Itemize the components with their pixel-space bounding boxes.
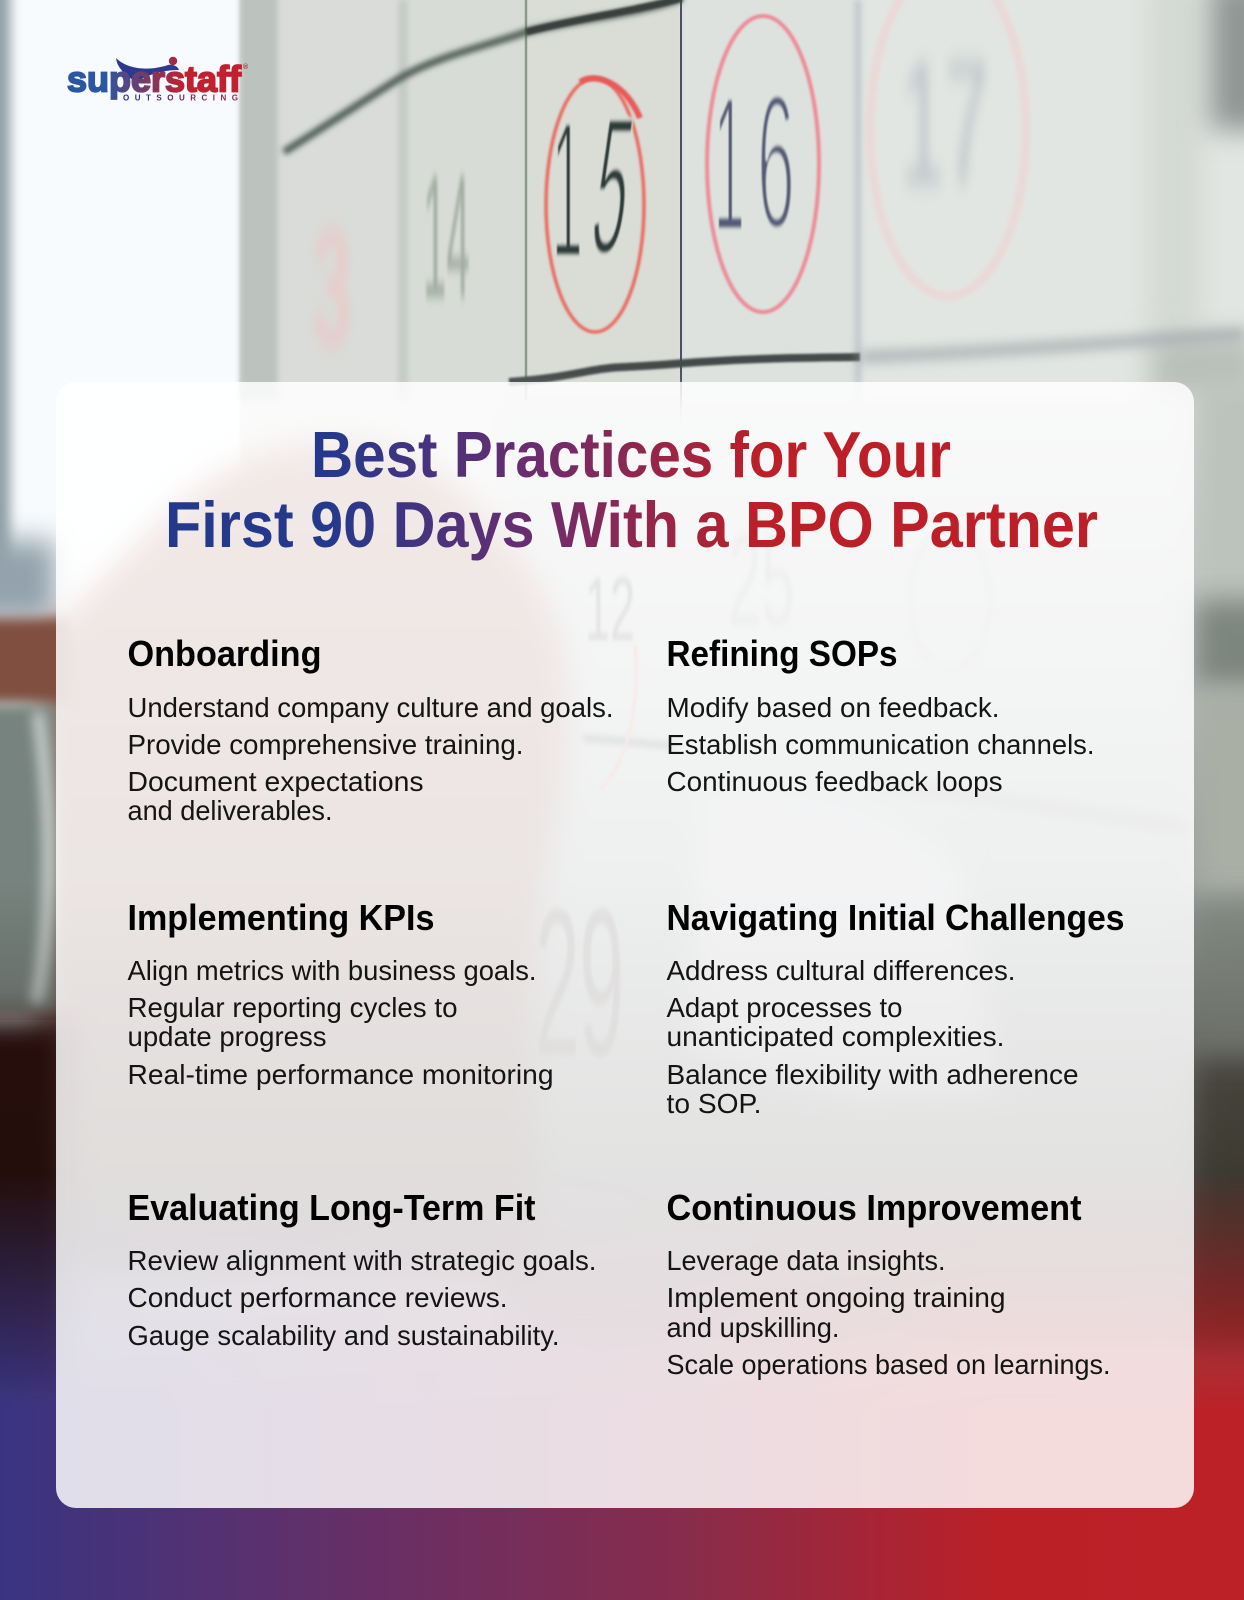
section: refining SOPs: Modify based on feedback. <box>666 692 1000 723</box>
handwritten dates: 1 <box>714 56 745 271</box>
section: navigating initial challenges: Navigating Initial Challenges <box>666 897 1124 938</box>
title <box>165 418 1098 561</box>
section: implementing KPIs: update progress <box>128 1021 326 1052</box>
section: implementing KPIs <box>128 897 554 1090</box>
section: navigating initial challenges: to SOP. <box>666 1088 762 1119</box>
section: evaluating long-term fit: Review alignment with strategic goals. <box>128 1245 596 1276</box>
title: First 90 Days With a BPO Partner <box>165 488 1098 561</box>
section: evaluating long-term fit: Evaluating Long-Term Fit <box>128 1187 536 1228</box>
handwritten dates: 6 <box>757 55 795 269</box>
red circled dates <box>546 0 1026 332</box>
logo swoosh <box>116 58 179 82</box>
whiteboard cells <box>240 0 1244 400</box>
section: refining SOPs: Refining SOPs <box>666 633 898 674</box>
section: evaluating long-term fit: Conduct performance reviews. <box>128 1282 508 1313</box>
section: refining SOPs <box>666 633 1094 797</box>
panel: translucent content card <box>56 382 1194 1508</box>
section: continuous improvement: Continuous Improvement <box>666 1187 1082 1228</box>
blurred board behind the panel <box>470 400 1244 1350</box>
handwritten dates: 14 <box>423 139 470 334</box>
title: Best Practices for Your <box>311 418 951 491</box>
logo tagline: OUTSOURCING <box>123 94 238 102</box>
dark gradient towards the bottom <box>0 880 1244 1600</box>
section: implementing KPIs: Regular reporting cycles to <box>128 992 458 1023</box>
section: navigating initial challenges: unanticipated complexities. <box>666 1021 1004 1052</box>
handwritten dates: 17 <box>900 25 989 220</box>
section: implementing KPIs: Implementing KPIs <box>128 897 434 938</box>
blue-to-red brand gradient at the bottom <box>0 1186 1244 1600</box>
blurred board behind the panel: 12 <box>585 560 635 660</box>
section: refining SOPs: Continuous feedback loops <box>666 766 1002 797</box>
handwritten dates: 3 <box>312 199 351 378</box>
section: continuous improvement: Implement ongoing training <box>666 1282 1006 1313</box>
section: refining SOPs: Establish communication channels. <box>666 729 1094 760</box>
section: onboarding: Document expectations <box>128 766 424 797</box>
section: continuous improvement: and upskilling. <box>666 1312 840 1343</box>
section: continuous improvement <box>666 1187 1110 1380</box>
section: continuous improvement: Scale operations based on learnings. <box>666 1349 1110 1380</box>
section: onboarding: and deliverables. <box>128 795 332 826</box>
section: navigating initial challenges: Address cultural differences. <box>666 955 1016 986</box>
section: evaluating long-term fit <box>128 1187 596 1351</box>
section: implementing KPIs: Real-time performance monitoring <box>128 1059 554 1090</box>
logo dot <box>169 57 177 65</box>
logo registered mark: ® <box>243 63 249 71</box>
handwritten dates: 5 <box>583 77 643 295</box>
logo wordmark: superstaff <box>67 58 242 100</box>
logo: superstaff outsourcing <box>67 57 249 102</box>
section: continuous improvement: Leverage data insights. <box>666 1245 946 1276</box>
handwritten dates: 1 <box>552 81 583 299</box>
section: onboarding: Understand company culture and goals. <box>128 692 614 723</box>
section: onboarding: Onboarding <box>128 633 322 674</box>
section: evaluating long-term fit: Gauge scalability and sustainability. <box>128 1320 560 1351</box>
section: onboarding <box>128 633 614 826</box>
blurred board behind the panel: 25 <box>728 508 795 653</box>
section: navigating initial challenges <box>666 897 1124 1119</box>
section: navigating initial challenges: Balance flexibility with adherence <box>666 1059 1078 1090</box>
grid lines <box>284 0 1244 1010</box>
section: implementing KPIs: Align metrics with business goals. <box>128 955 536 986</box>
hand and arm <box>0 443 624 1400</box>
handwritten dates <box>312 25 989 378</box>
right edge of board <box>1194 380 1244 1340</box>
faint date 29: 29 <box>535 865 624 1100</box>
section: onboarding: Provide comprehensive training. <box>128 729 524 760</box>
section: navigating initial challenges: Adapt processes to <box>666 992 902 1023</box>
window light on the left <box>0 0 240 680</box>
right side shading of board <box>1150 0 1244 405</box>
